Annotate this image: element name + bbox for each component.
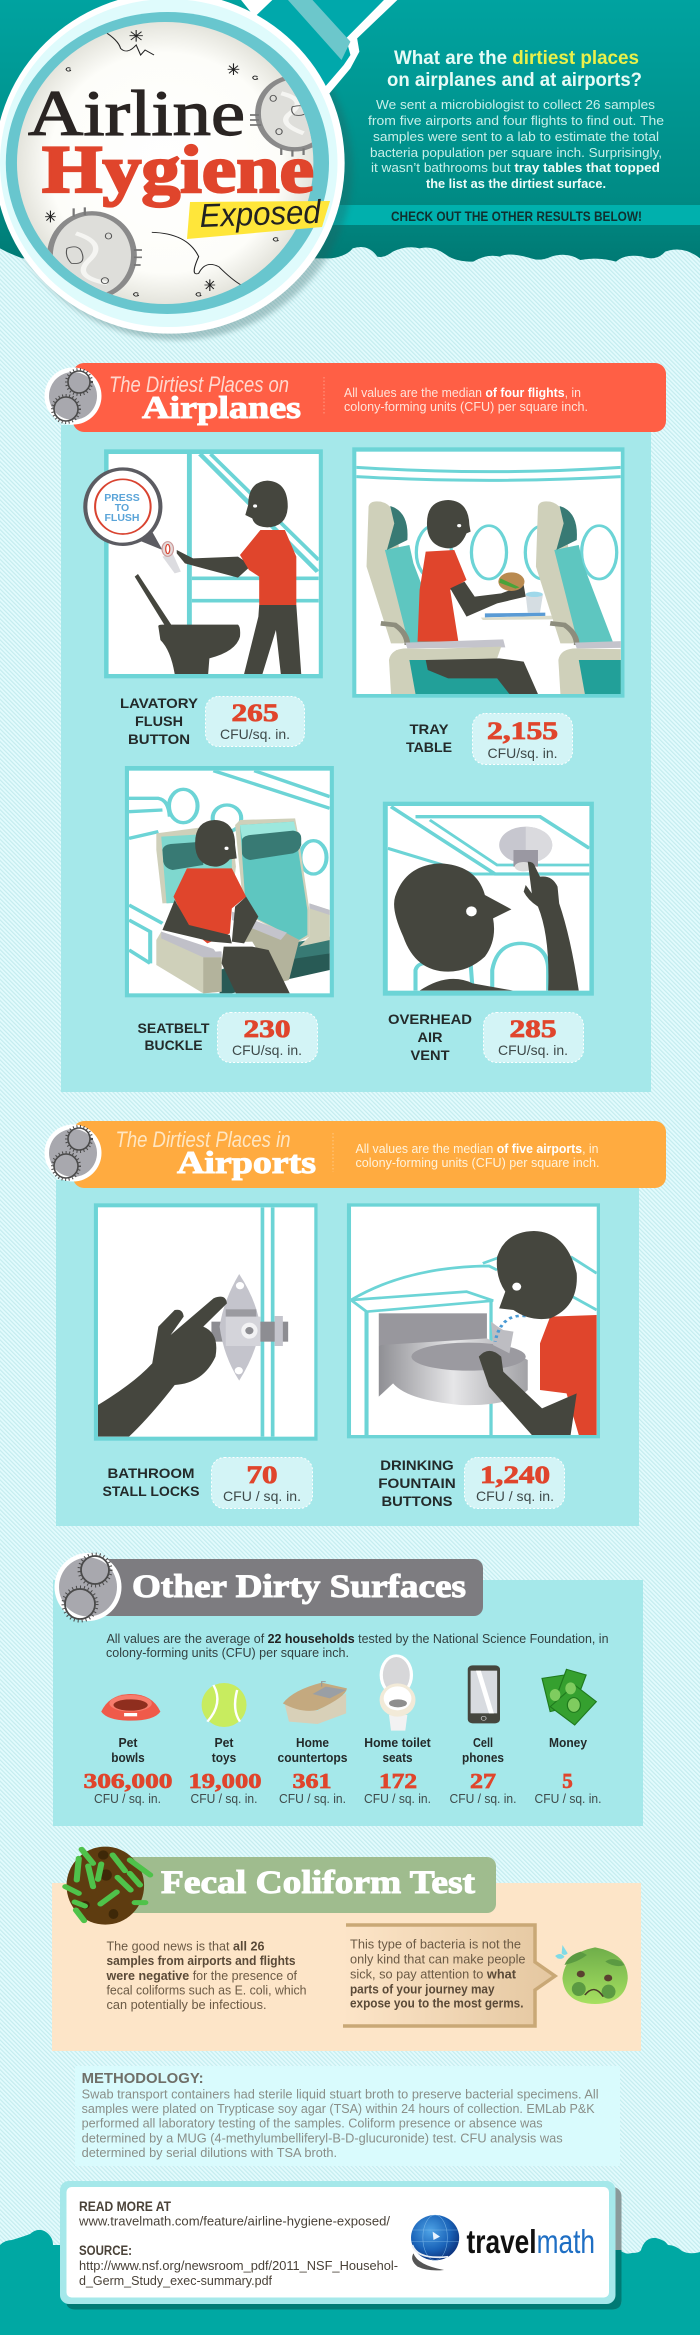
item: money: Money xyxy=(549,1735,588,1750)
label: bathroom stall locks: STALL LOCKS xyxy=(102,1483,200,1499)
title: Airline Hygiene Exposed: Airline xyxy=(28,78,245,150)
callout: journey warning: This type of bacteria is not the xyxy=(350,1936,521,1952)
bacteria doodles xyxy=(45,30,331,297)
box: read more and source: d_Germ_Study_exec-summary.pdf xyxy=(79,2273,272,2288)
intro text: bacteria population per square inch. Surprisingly, xyxy=(370,145,662,160)
box: read more and source: www.travelmath.com/feature/airline-hygiene-exposed/ xyxy=(78,2214,390,2228)
value: 2,155: 2,155 xyxy=(487,718,558,745)
label: drinking fountain buttons: DRINKING xyxy=(380,1457,454,1473)
callout: journey warning xyxy=(343,1925,555,2026)
item: home countertops: 361 xyxy=(292,1769,332,1793)
panel: methodology: determined by serial dilutions with TSA broth. xyxy=(82,2145,337,2160)
value: 230 xyxy=(218,1012,318,1062)
label: drinking fountain buttons xyxy=(378,1457,456,1509)
icon: pet bowl xyxy=(101,1694,160,1721)
value: 230: 230 xyxy=(244,1016,290,1043)
value: 285: 285 xyxy=(510,1016,556,1043)
item: cell phones: phones xyxy=(462,1750,504,1765)
label: seatbelt buckle: SEATBELT xyxy=(138,1020,210,1036)
box: read more and source: SOURCE: xyxy=(79,2243,132,2258)
person xyxy=(209,942,256,952)
label: bathroom stall locks: BATHROOM xyxy=(108,1465,194,1481)
icon: bacteria on dirt xyxy=(65,1847,150,1925)
title: Airline Hygiene Exposed: Exposed xyxy=(199,193,323,234)
intro text: samples were sent to a lab to estimate the total xyxy=(373,129,659,144)
footer band xyxy=(0,2230,700,2335)
value: 2,155 xyxy=(472,714,572,764)
badge icon xyxy=(44,368,102,424)
illustration: bathroom stall lock xyxy=(94,1203,318,1441)
intro text: the list as the dirtiest surface. xyxy=(426,176,606,191)
right seat xyxy=(536,501,621,694)
item: cell phones: Cell xyxy=(473,1735,493,1750)
logo: travelmath xyxy=(411,2215,595,2270)
item: pet bowls: CFU / sq. in. xyxy=(94,1791,161,1806)
description: other surfaces: All values are the average of 22 households tested by the National Science Foundation, in xyxy=(106,1631,608,1646)
illustration: tray table xyxy=(352,447,624,698)
item: home toilet seats: Home toilet xyxy=(364,1735,431,1750)
panel: methodology: METHODOLOGY: xyxy=(82,2071,204,2087)
icon: cell phone xyxy=(468,1665,500,1723)
item: cell phones xyxy=(450,1735,516,1806)
heading bar: airports xyxy=(44,1121,666,1188)
panel: methodology: Swab transport containers had sterile liquid stuart broth to preserve bacterial specimens. All xyxy=(82,2086,599,2102)
icon: tennis ball xyxy=(202,1683,247,1727)
panel: other dirty surfaces xyxy=(53,1580,643,1826)
callout: journey warning: sick, so pay attention to what xyxy=(350,1966,517,1982)
intro text xyxy=(368,97,664,191)
box: read more and source: http://www.nsf.org/newsroom_pdf/2011_NSF_Househol- xyxy=(79,2258,398,2273)
item: pet bowls xyxy=(84,1735,172,1806)
heading bar: airplanes: Airplanes xyxy=(142,389,301,425)
intro text: from five airports and four flights to find out. The xyxy=(368,113,664,128)
label: lavatory flush button: LAVATORY xyxy=(120,695,199,711)
callout: journey warning: parts of your journey may xyxy=(350,1982,495,1996)
magnifying glass xyxy=(0,0,397,340)
value: 70: 70 xyxy=(246,1462,278,1489)
value: 70 xyxy=(212,1458,312,1508)
panel: fecal coliform test xyxy=(52,1883,641,2051)
badge icon xyxy=(44,1124,102,1182)
heading bar: airports: The Dirtiest Places in xyxy=(116,1127,290,1152)
description: other surfaces: colony-forming units (CFU) per square inch. xyxy=(106,1645,349,1660)
item: home countertops: countertops xyxy=(278,1750,348,1765)
item: pet toys: Pet xyxy=(214,1735,234,1750)
text: good news: samples from airports and flights xyxy=(106,1953,296,1968)
panel: methodology xyxy=(75,2066,620,2166)
description: other surfaces xyxy=(106,1631,608,1660)
callout text: press to flush: TO xyxy=(115,502,129,514)
item: home countertops: Home xyxy=(296,1735,329,1750)
value: 265: 265 xyxy=(232,700,278,727)
heading bar: airports: colony-forming units (CFU) per square inch. xyxy=(356,1156,600,1170)
logo: travelmath: travelmath xyxy=(466,2223,595,2260)
callout text: press to flush: PRESS xyxy=(104,492,140,504)
item: money: CFU / sq. in. xyxy=(534,1791,602,1806)
label: tray table: TRAY xyxy=(410,721,449,737)
label: lavatory flush button xyxy=(120,695,199,747)
handle xyxy=(241,0,397,95)
heading bar: other dirty surfaces xyxy=(54,1553,483,1621)
value: 285: CFU/sq. in. xyxy=(498,1042,568,1058)
value: 1,240: 1,240 xyxy=(480,1462,550,1489)
intro heading: What are the dirtiest places xyxy=(394,48,639,69)
item: money xyxy=(534,1735,602,1806)
banner: check out results: CHECK OUT THE OTHER RESULTS BELOW! xyxy=(391,209,642,224)
callout text: press to flush xyxy=(104,492,140,524)
heading bar: airports: All values are the median of five airports, in xyxy=(356,1142,599,1156)
value: 2,155: CFU/sq. in. xyxy=(488,745,558,761)
label: tray table: TABLE xyxy=(406,739,452,755)
item: home countertops xyxy=(278,1735,348,1806)
item: pet bowls: Pet xyxy=(118,1735,138,1750)
panel: airports xyxy=(56,1180,639,1526)
panel: methodology: performed all laboratory testing of the samples. Coliform presence or absence was xyxy=(82,2116,543,2130)
intro text: We sent a microbiologist to collect 26 samples xyxy=(376,97,656,112)
text: good news: The good news is that all 26 xyxy=(106,1938,264,1954)
title: Airline Hygiene Exposed xyxy=(28,78,330,239)
callout text: press to flush: FLUSH xyxy=(104,512,140,524)
left seat xyxy=(367,501,509,694)
heading bar: airplanes: The Dirtiest Places on xyxy=(109,372,289,397)
heading bar: airplanes xyxy=(44,363,666,432)
label: seatbelt buckle: BUCKLE xyxy=(144,1037,202,1053)
box: read more and source: READ MORE AT xyxy=(79,2199,172,2214)
item: pet toys: CFU / sq. in. xyxy=(190,1791,258,1806)
item: home toilet seats: CFU / sq. in. xyxy=(364,1791,431,1806)
item: pet toys: 19,000 xyxy=(188,1769,262,1793)
label: lavatory flush button: BUTTON xyxy=(128,731,190,747)
value: 230: CFU/sq. in. xyxy=(232,1042,302,1058)
box: read more and source xyxy=(60,2181,622,2310)
text: good news: fecal coliforms such as E. coli, which xyxy=(106,1982,306,1998)
item: home countertops: CFU / sq. in. xyxy=(279,1791,346,1806)
heading bar: airplanes: All values are the median of four flights, in xyxy=(344,386,581,400)
label: tray table xyxy=(406,721,452,755)
badge icon xyxy=(54,1553,122,1621)
item: home toilet seats xyxy=(364,1735,431,1806)
illustration: overhead air vent xyxy=(383,802,594,996)
label: overhead air vent: OVERHEAD xyxy=(388,1011,472,1027)
heading bar: fecal coliform test: Fecal Coliform Test xyxy=(161,1865,475,1901)
label: overhead air vent: VENT xyxy=(410,1047,450,1063)
item: pet toys xyxy=(188,1735,262,1806)
value: 1,240: CFU / sq. in. xyxy=(476,1488,554,1504)
heading bar: airports: Airports xyxy=(177,1144,316,1180)
icon: sick face xyxy=(555,1945,628,2004)
header band xyxy=(0,0,700,262)
panel: airplanes xyxy=(61,425,651,1092)
item: pet toys: toys xyxy=(212,1750,236,1765)
value: 1,240 xyxy=(464,1458,564,1508)
heading bar: fecal coliform test xyxy=(65,1847,496,1925)
intro text: it wasn’t bathrooms but tray tables that topped xyxy=(371,160,660,175)
label: bathroom stall locks xyxy=(102,1465,200,1499)
title: Airline Hygiene Exposed: Hygiene xyxy=(42,131,314,207)
label: drinking fountain buttons: BUTTONS xyxy=(382,1493,452,1509)
left seat xyxy=(156,827,236,903)
item: cell phones: 27 xyxy=(470,1769,496,1793)
value: 285 xyxy=(484,1012,584,1062)
value: 265 xyxy=(206,696,304,746)
item: cell phones: CFU / sq. in. xyxy=(450,1791,516,1806)
icon: toilet xyxy=(380,1654,416,1731)
intro heading xyxy=(387,48,642,91)
illustration: seatbelt buckle xyxy=(125,766,334,997)
text: good news: were negative for the presence of xyxy=(106,1968,297,1983)
item: money: 5 xyxy=(562,1769,573,1793)
label: lavatory flush button: FLUSH xyxy=(135,713,183,729)
label: overhead air vent: AIR xyxy=(418,1029,442,1045)
icon: money xyxy=(542,1669,596,1725)
icon: countertop xyxy=(283,1682,347,1724)
text: good news: can potentially be infectious. xyxy=(106,1997,266,2012)
callout bubble xyxy=(85,469,173,556)
intro heading: on airplanes and at airports? xyxy=(387,70,642,91)
value: 70: CFU / sq. in. xyxy=(223,1488,301,1504)
illustration: lavatory flush button xyxy=(85,449,323,678)
right seat xyxy=(235,818,309,942)
panel: methodology: samples were plated on Trypticase soy agar (TSA) within 24 hours of collection. EMLab P&K xyxy=(82,2101,595,2116)
label: drinking fountain buttons: FOUNTAIN xyxy=(378,1475,456,1491)
text: good news xyxy=(106,1938,306,2012)
illustration: drinking fountain xyxy=(347,1203,600,1438)
callout: journey warning: only kind that can make people xyxy=(350,1952,526,1966)
item: home toilet seats: seats xyxy=(382,1750,412,1765)
heading bar: other dirty surfaces: Other Dirty Surfaces xyxy=(132,1569,466,1605)
item: home toilet seats: 172 xyxy=(379,1769,417,1793)
item: pet bowls: bowls xyxy=(111,1750,145,1765)
heading bar: airplanes: colony-forming units (CFU) per square inch. xyxy=(344,400,588,414)
value: 265: CFU/sq. in. xyxy=(220,726,290,742)
item: pet bowls: 306,000 xyxy=(84,1769,172,1793)
label: seatbelt buckle xyxy=(138,1020,210,1053)
banner: check out results xyxy=(330,205,700,225)
callout: journey warning: expose you to the most germs. xyxy=(350,1996,524,2010)
label: overhead air vent xyxy=(388,1011,472,1063)
panel: methodology: determined by a MUG (4-methylumbelliferyl-B-D-glucuronide) test. CFU analysis was xyxy=(82,2130,563,2146)
